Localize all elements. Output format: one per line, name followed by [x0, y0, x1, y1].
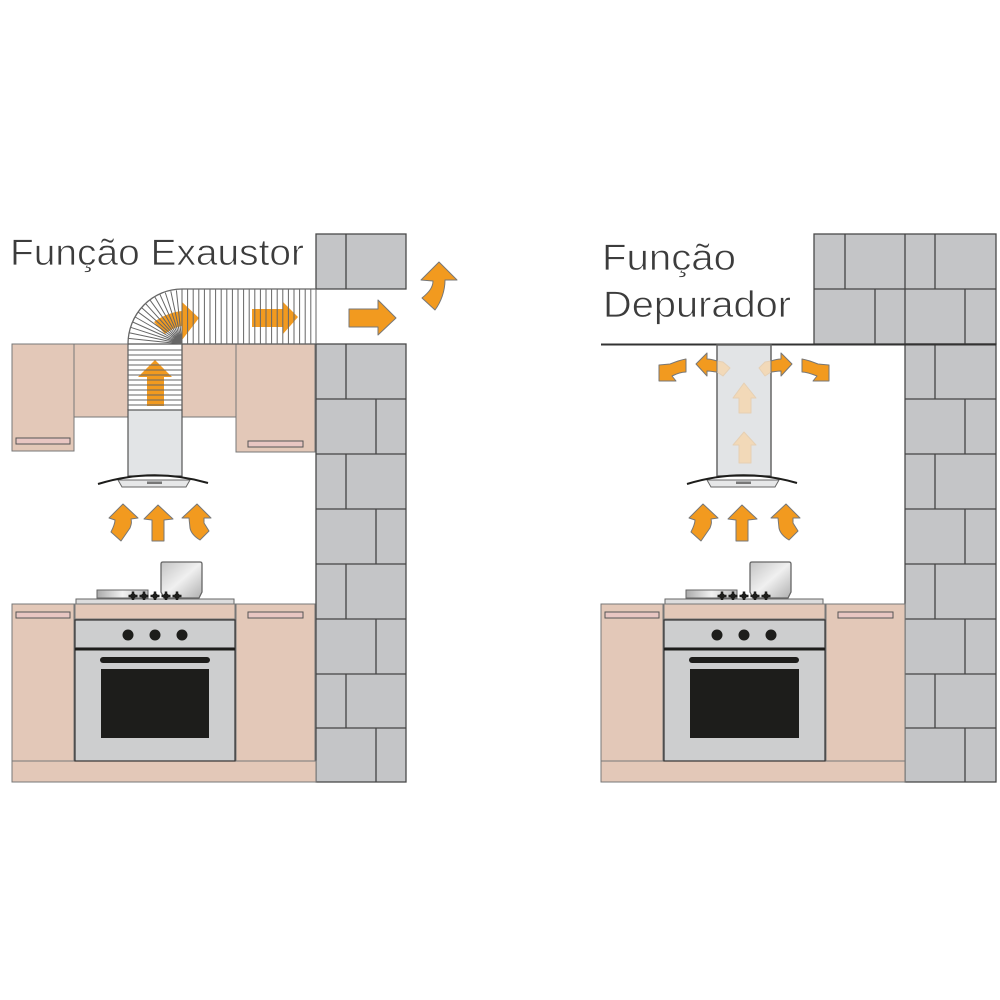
- panel: Função Depurador diagram: [601, 234, 996, 782]
- range hood canopy: [98, 475, 208, 487]
- arrow: up inside duct: [138, 360, 172, 406]
- arrows: rising air under hood: [109, 504, 211, 541]
- hood chimney: [128, 410, 182, 476]
- arrow: right leaving through wall: [349, 300, 396, 335]
- title: Função Depurador: Função: [602, 237, 736, 278]
- base cabinets: [12, 604, 316, 782]
- brick wall: upper section: [316, 234, 406, 289]
- oven: [75, 620, 235, 761]
- arrows: rising air under hood: [689, 504, 800, 541]
- base cabinets: [601, 604, 905, 782]
- range hood canopy: [687, 475, 797, 487]
- upper cabinets: [12, 344, 315, 452]
- brick wall: lower section: [905, 344, 996, 782]
- title: Função Exaustor: Função Exaustor: [10, 232, 304, 273]
- cookware: [76, 562, 234, 604]
- arrows: faded air rising inside chimney: [717, 361, 771, 463]
- cookware: [665, 562, 823, 604]
- brick wall: upper section: [814, 234, 996, 344]
- arrow: curved inside duct bend: [154, 302, 199, 340]
- oven: [664, 620, 825, 761]
- arrows: clean air returning to the room: [659, 353, 829, 381]
- arrow: curved up outside wall: [421, 262, 457, 310]
- flexible duct: [128, 289, 316, 410]
- brick wall: lower section: [316, 344, 406, 782]
- hood chimney: [717, 345, 771, 476]
- panel: Função Exaustor diagram: [10, 232, 457, 782]
- title: Função Depurador: Depurador: [603, 284, 791, 325]
- arrow: right inside duct: [252, 302, 298, 334]
- ceiling line: [601, 344, 996, 346]
